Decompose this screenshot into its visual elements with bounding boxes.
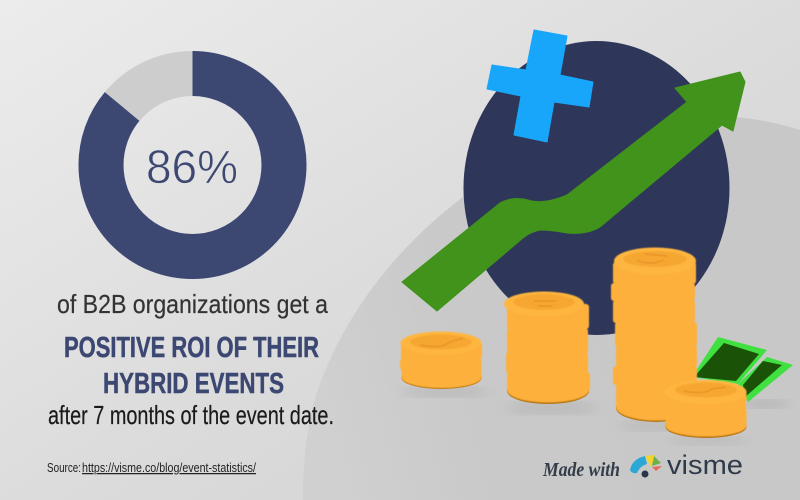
coin stack 1 [400, 332, 489, 397]
icon: blue plus [487, 30, 593, 142]
statistic description text: HYBRID EVENTS [103, 368, 284, 400]
coin stack 3 [611, 248, 702, 431]
statistic description text: after 7 months of the event date. [48, 400, 334, 430]
statistic description text [48, 289, 334, 430]
source line: Source: [47, 461, 81, 475]
source line: https://visme.co/blog/event-statistics/ [82, 461, 256, 475]
icon: visme logo [630, 455, 662, 478]
donut chart: 86% [101, 74, 284, 256]
made with label: Made with [542, 459, 620, 481]
visme brand footer [542, 450, 743, 481]
icon: green banknotes [692, 337, 793, 408]
coin stack 4 [664, 380, 750, 445]
donut value: 86% [146, 140, 238, 193]
visme wordmark: visme [667, 450, 743, 480]
statistic description text: of B2B organizations get a [57, 289, 328, 319]
arrow: rising green trend [402, 72, 745, 311]
coin stack 2 [504, 292, 598, 414]
statistic description text: POSITIVE ROI OF THEIR [64, 332, 319, 364]
navy circle backdrop [464, 41, 730, 335]
